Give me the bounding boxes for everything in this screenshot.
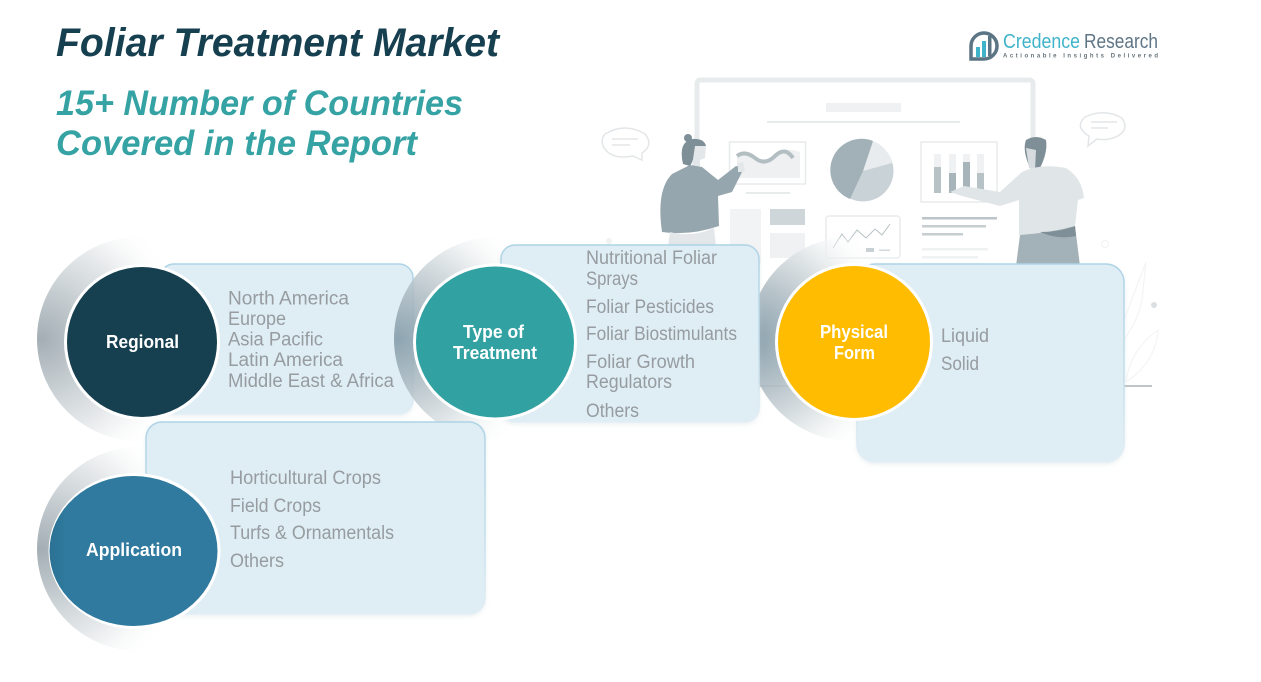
floor line [620, 385, 1152, 387]
segment: application [37, 422, 485, 651]
circle: type of treatment [413, 264, 577, 420]
monitor heading bars [767, 103, 960, 123]
woman presenter [660, 134, 745, 246]
subtitle: Covered in the Report [56, 124, 418, 163]
list: regions: Europe [228, 309, 286, 330]
list: regions: Middle East & Africa [228, 371, 394, 392]
panel: treatment options [501, 245, 759, 422]
list: treatments: Foliar Growth [586, 352, 695, 373]
layout blocks [730, 209, 805, 263]
circle: physical form: Physical [820, 322, 888, 342]
list: physical form: Solid [941, 354, 979, 375]
panel: regional options [160, 264, 413, 414]
list: treatments: Regulators [586, 372, 672, 393]
circle: regional: Regional [106, 332, 179, 352]
list: applications [230, 468, 394, 572]
circle: physical form: Form [834, 343, 875, 363]
text lines [922, 217, 997, 258]
speech bubble right [1080, 113, 1125, 146]
circle: type of treatment: Treatment [453, 343, 537, 363]
list: regions: Latin America [228, 350, 343, 371]
pie chart [830, 139, 894, 202]
crescent backdrop [37, 447, 241, 651]
list: applications: Others [230, 551, 284, 572]
title: Foliar Treatment Market [56, 21, 501, 65]
logo: Credence Research [971, 31, 1158, 60]
list: treatments: Foliar Pesticides [586, 297, 714, 318]
list: treatments [586, 248, 737, 422]
list: applications: Horticultural Crops [230, 468, 381, 489]
line chart card [826, 216, 900, 258]
bar chart card [921, 142, 997, 202]
panel: physical form options [857, 264, 1124, 462]
crescent backdrop [749, 237, 953, 441]
list: regions [228, 288, 394, 392]
circle: regional [64, 264, 220, 420]
list: regions: North America [228, 288, 349, 310]
logo tagline: Actionable Insights Delivered [1003, 54, 1158, 60]
circle: physical form [775, 263, 933, 421]
speech bubble left [602, 128, 649, 160]
area chart card [730, 142, 806, 194]
decorative leaves [1102, 240, 1158, 382]
crescent backdrop [394, 237, 598, 441]
crescent backdrop [37, 237, 241, 441]
segment: physical form [749, 237, 1124, 462]
list: treatments: Others [586, 401, 639, 422]
list: physical form: Liquid [941, 326, 989, 347]
panel: application options [146, 422, 485, 614]
segment: type of treatment [394, 237, 759, 441]
logo wordmark Credence: Credence [1003, 31, 1080, 53]
illustration: two people presenting charts on a screen [602, 80, 1158, 387]
circle: application: Application [86, 540, 182, 560]
segment: regional [37, 237, 413, 441]
list: treatments: Foliar Biostimulants [586, 324, 737, 345]
list: applications: Turfs & Ornamentals [230, 523, 394, 544]
subtitle [56, 84, 463, 163]
circle: application [48, 473, 220, 629]
list: treatments: Nutritional Foliar [586, 248, 718, 269]
list: treatments: Sprays [586, 269, 638, 290]
icon: logo mark [971, 33, 997, 59]
list: regions: Asia Pacific [228, 330, 323, 350]
logo wordmark Research: Research [1084, 31, 1158, 53]
man presenter [950, 137, 1084, 266]
monitor frame [697, 80, 1033, 140]
list: physical form [941, 326, 989, 375]
circle: type of treatment: Type of [463, 322, 525, 342]
list: applications: Field Crops [230, 496, 321, 517]
subtitle: 15+ Number of Countries [56, 84, 463, 123]
